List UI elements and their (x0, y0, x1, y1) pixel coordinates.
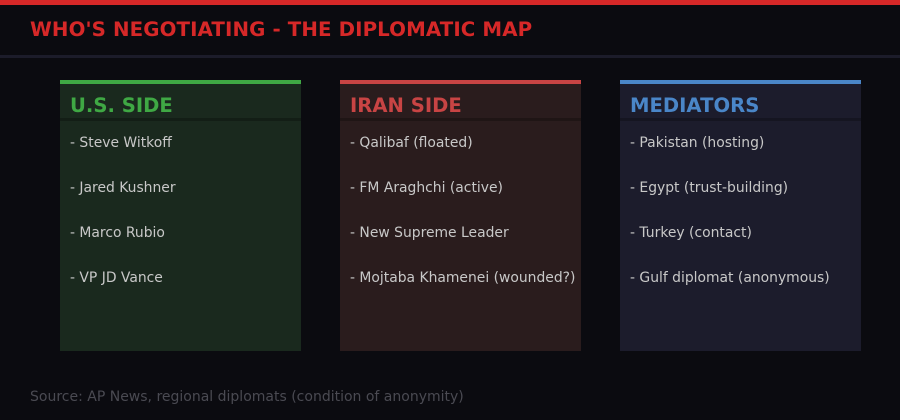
item: - VP JD Vance (70, 270, 163, 286)
item: - New Supreme Leader (350, 225, 509, 241)
panel: mediators (620, 80, 861, 351)
top accent bar (0, 0, 900, 5)
item: - Jared Kushner (70, 180, 176, 196)
heading: mediators: MEDIATORS (630, 94, 759, 117)
title: WHO'S NEGOTIATING - THE DIPLOMATIC MAP (30, 18, 532, 41)
item: - Pakistan (hosting) (630, 135, 764, 151)
item: - Steve Witkoff (70, 135, 172, 151)
heading: Iran side: IRAN SIDE (350, 94, 462, 117)
heading: mediators (620, 84, 861, 121)
heading: Iran side (340, 84, 581, 121)
heading: U.S. side: U.S. SIDE (70, 94, 173, 117)
heading: U.S. side (60, 84, 301, 121)
item: - Mojtaba Khamenei (wounded?) (350, 270, 575, 286)
item: - Egypt (trust-building) (630, 180, 788, 196)
panel: U.S. side (60, 80, 301, 351)
source note: Source: AP News, regional diplomats (condition of anonymity) (30, 389, 464, 405)
item: - Qalibaf (floated) (350, 135, 473, 151)
panel: Iran side (340, 80, 581, 351)
item: - Gulf diplomat (anonymous) (630, 270, 830, 286)
item: - Turkey (contact) (630, 225, 752, 241)
item: - FM Araghchi (active) (350, 180, 503, 196)
item: - Marco Rubio (70, 225, 165, 241)
